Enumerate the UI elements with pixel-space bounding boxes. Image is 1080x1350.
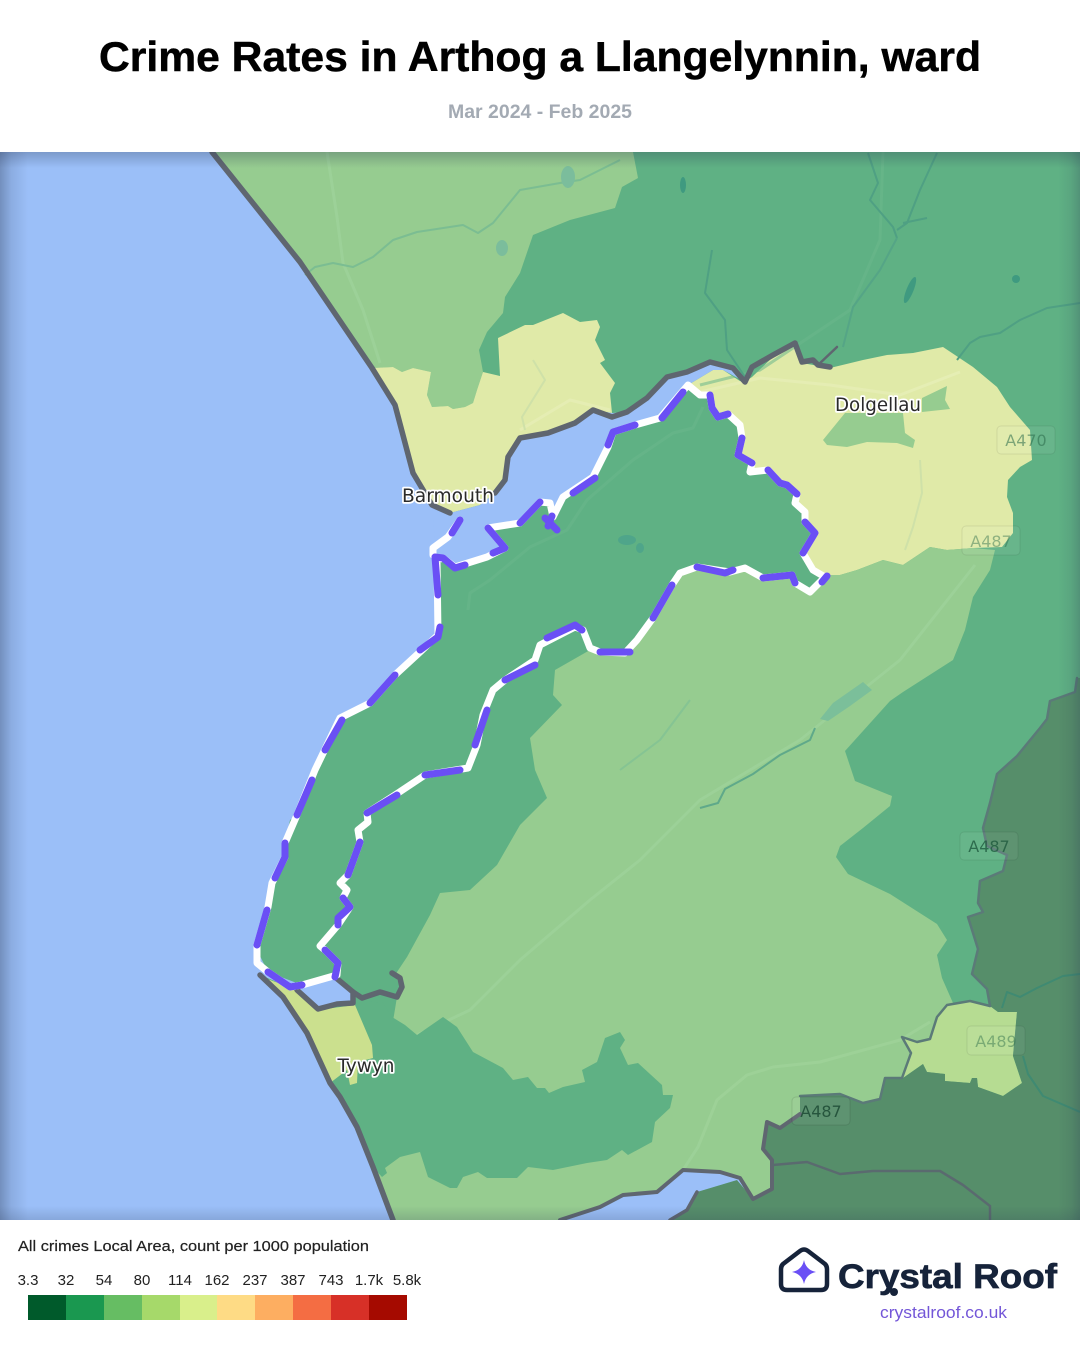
area: Dolgellau yellow <box>688 343 1032 575</box>
area: Barmouth yellow <box>372 313 615 513</box>
road label: A489 <box>967 1026 1025 1055</box>
title: Crime Rates in Arthog a Llangelynnin, ward <box>99 33 981 80</box>
area: Tywyn south mid green <box>374 1017 673 1188</box>
patch: Dolgellau town east <box>922 386 950 412</box>
road label: A489: A489 <box>975 1032 1017 1051</box>
area: Tywyn town yellow green <box>262 977 373 1085</box>
label: Dolgellau: Dolgellau <box>835 394 921 416</box>
road label: A487 central <box>960 832 1018 860</box>
coastline and shoreline <box>212 152 1077 1220</box>
legend title: All crimes Local Area, count per 1000 population <box>18 1238 369 1255</box>
road label: A470 <box>997 426 1055 454</box>
subtitle: date range: Mar 2024 - Feb 2025 <box>448 102 632 123</box>
ward boundary: white outline <box>257 385 825 987</box>
legend colour scale <box>28 1295 407 1320</box>
road label: A487 east: A487 <box>970 532 1012 551</box>
legend values: 114 <box>168 1272 192 1289</box>
logo url: crystalroof.co.uk <box>880 1303 1008 1322</box>
road label: A487 south <box>792 1097 850 1125</box>
legend values: 54 <box>96 1272 112 1289</box>
legend values: 387 <box>280 1272 306 1289</box>
logo key dot on y <box>890 1288 898 1296</box>
roads <box>520 347 960 431</box>
legend values: 743 <box>318 1272 344 1289</box>
road label: A487 south: A487 <box>800 1102 842 1121</box>
land base: mid green areas <box>212 152 1080 1220</box>
legend values: 237 <box>242 1272 268 1289</box>
estuary: Dyfi inlet at bottom <box>566 1172 745 1220</box>
area: dark green east and south <box>670 678 1080 1220</box>
legend values: 80 <box>134 1272 150 1289</box>
estuary: inlet north of Tywyn <box>297 977 353 1009</box>
rivers and lakes <box>305 153 1080 1112</box>
ward boundary: purple dashes <box>257 392 827 987</box>
area: north-west light green <box>212 152 638 409</box>
area: A489 pale green <box>902 1001 1022 1096</box>
legend values: 5.8k <box>393 1272 422 1289</box>
icon: house with star <box>781 1250 827 1290</box>
legend values: 32 <box>58 1272 74 1289</box>
label: Barmouth: Barmouth <box>402 485 494 507</box>
logo wordmark: Crystal Roof <box>838 1258 1058 1296</box>
road label: A487 east <box>962 526 1020 555</box>
logo: Crystal Roof <box>781 1250 1058 1322</box>
label: Tywyn: Tywyn <box>337 1055 394 1077</box>
legend <box>18 1238 422 1320</box>
legend values: 1.7k <box>355 1272 384 1289</box>
road label: A470: A470 <box>1005 431 1047 450</box>
legend values <box>18 1272 422 1289</box>
patch: Dolgellau town south <box>823 413 915 448</box>
legend values: 162 <box>204 1272 230 1289</box>
road label: A487 central: A487 <box>968 837 1010 856</box>
map panel <box>0 152 1080 1220</box>
legend values: 3.3 <box>18 1272 38 1289</box>
area: large southern light green <box>373 547 995 1220</box>
sea <box>0 152 436 1220</box>
estuary: Afon Mawddach <box>432 362 745 567</box>
